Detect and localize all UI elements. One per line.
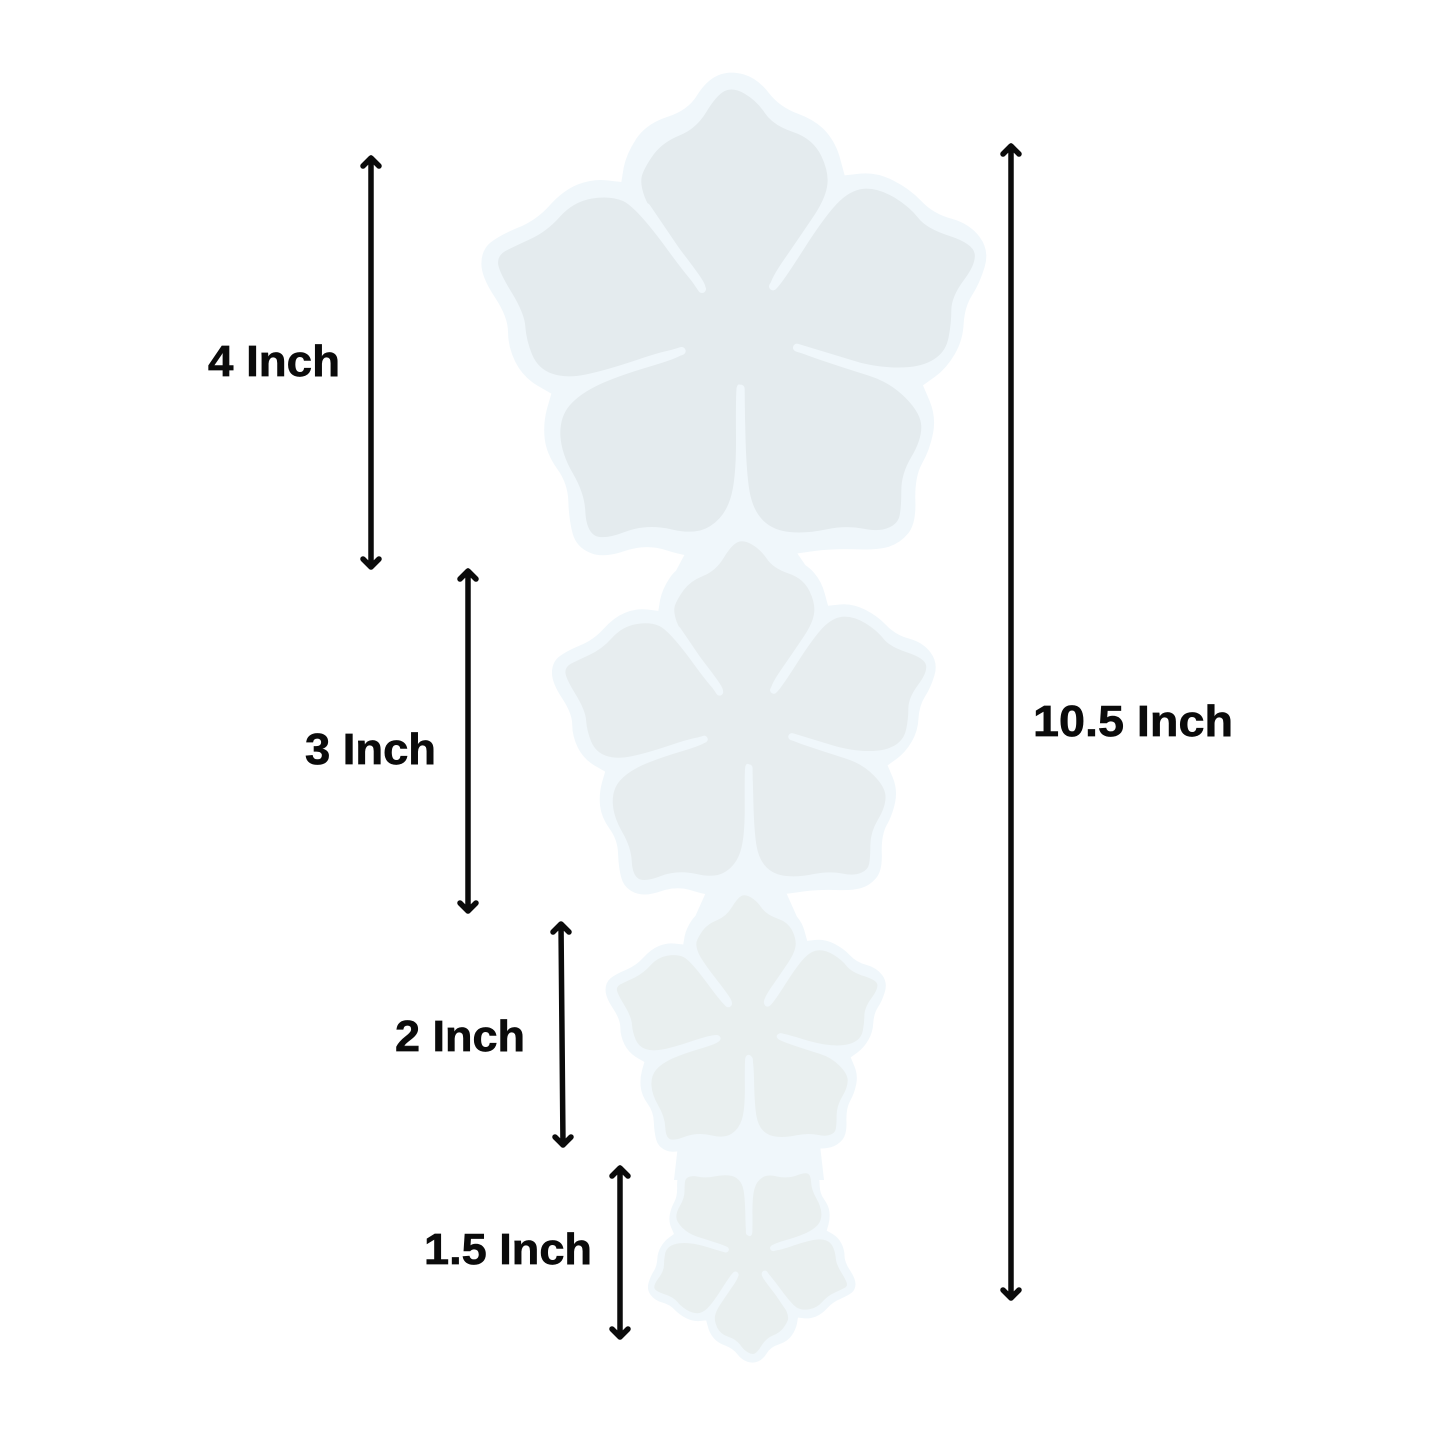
flower cavity: 2 inch bbox=[615, 893, 879, 1142]
flower cavity: 3 inch bbox=[565, 541, 927, 881]
arrow: 3 inch bbox=[460, 571, 476, 911]
label: 4 Inch: 4 Inch bbox=[208, 337, 340, 386]
label: 2 Inch: 2 Inch bbox=[395, 1012, 525, 1061]
arrow: 4 inch bbox=[363, 158, 379, 567]
label: 1.5 Inch: 1.5 Inch bbox=[424, 1225, 592, 1274]
arrow: 2 inch bbox=[553, 924, 571, 1145]
arrow: 1.5 inch bbox=[612, 1168, 628, 1337]
flower cavity: 1.5 inch bbox=[653, 1172, 849, 1356]
label: 3 Inch: 3 Inch bbox=[305, 725, 436, 774]
arrow: 10.5 inch overall bbox=[1003, 146, 1019, 1298]
silicone mold silhouette bbox=[481, 73, 986, 1363]
flower cavity: 4 inch bbox=[498, 90, 975, 537]
label: 10.5 Inch: 10.5 Inch bbox=[1033, 697, 1233, 746]
